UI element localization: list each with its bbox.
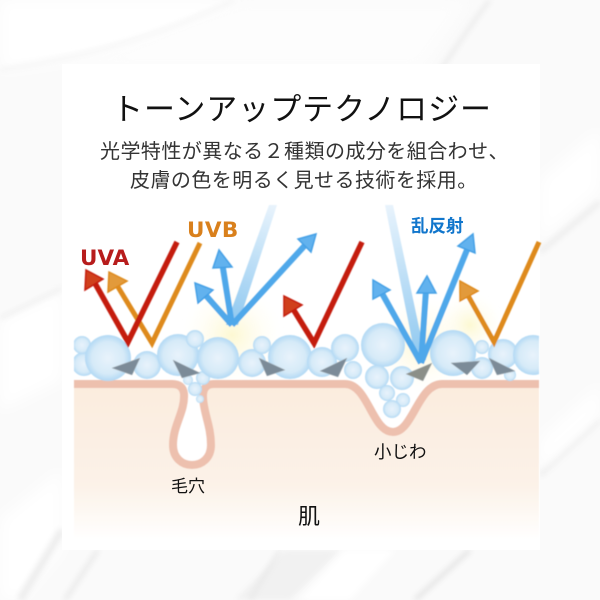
text block: description: 皮膚の色を明るく見せる技術を採用。: [130, 169, 478, 192]
arrow: UVA red left: [85, 242, 177, 342]
skin: base with pore and wrinkle: [74, 384, 539, 540]
panel: white card: [62, 64, 540, 550]
diagram: tone-up illustration: [72, 205, 553, 540]
text block: description: 光学特性が異なる２種類の成分を組合わせ、: [100, 140, 509, 163]
title: トーンアップテクノロジー: [112, 92, 492, 127]
arrow: blue scatter right with incoming beam: [373, 205, 475, 363]
label: skin: 肌: [298, 504, 320, 529]
label: UVA: UVA: [80, 246, 130, 271]
label: pore: 毛穴: [171, 477, 205, 496]
bubbles: powder particles: [72, 323, 553, 418]
glow: reflection highlights: [180, 283, 504, 395]
label: UVB: UVB: [187, 218, 239, 243]
label: fine wrinkles: 小じわ: [374, 442, 426, 462]
arrow: UVA red centre: [284, 242, 362, 343]
arrow: blue scatter left with incoming beam: [195, 205, 316, 325]
arrow: UVB orange right: [460, 242, 539, 342]
arrow: UVB orange left: [108, 243, 200, 343]
label: scattered reflection: 乱反射: [411, 216, 464, 236]
triangles: reflective pigment: [112, 358, 515, 381]
text block: description: [100, 140, 509, 192]
